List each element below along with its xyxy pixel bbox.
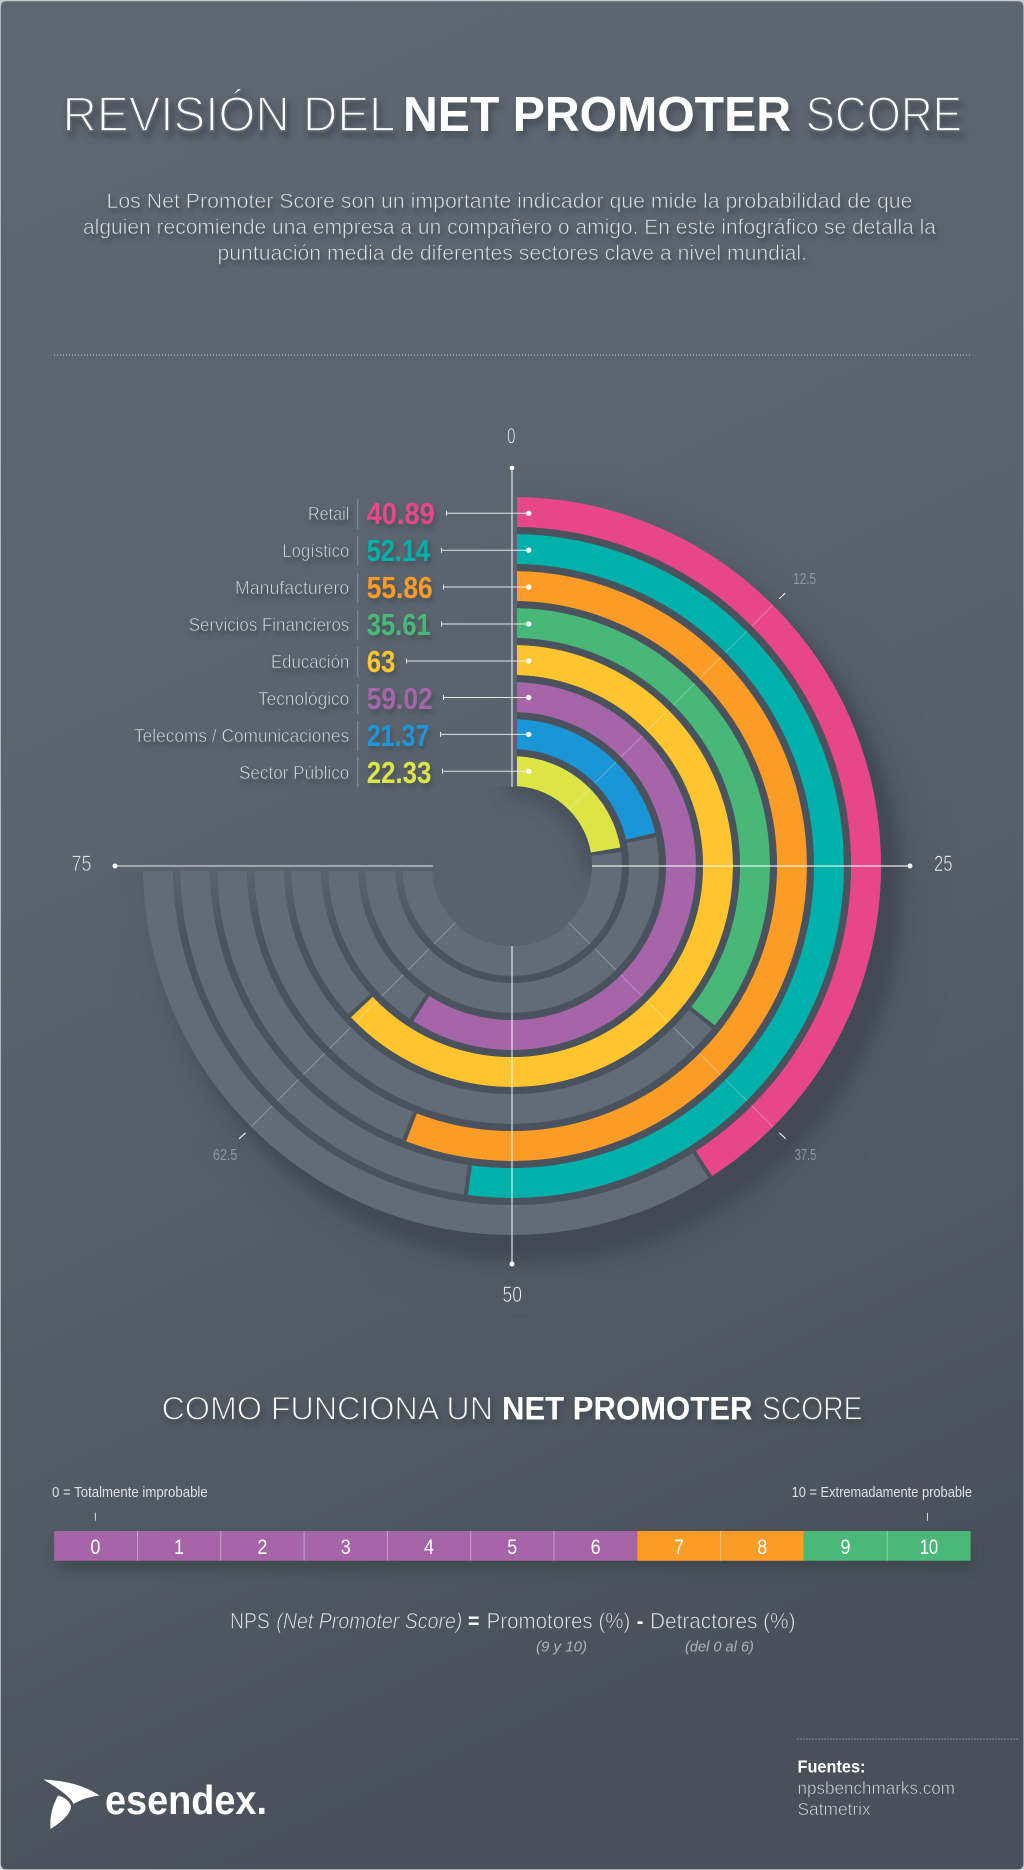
esendex logo: esendex. xyxy=(105,1777,267,1823)
legend row: Telecoms / Comunicaciones: 21.37 xyxy=(367,718,429,753)
legend row: Logístico: 52.14 xyxy=(367,533,431,568)
legend row: Sector Público: Sector Público xyxy=(239,762,349,783)
legend row: Sector Público xyxy=(239,755,531,790)
NPS formula: Promotores (%) xyxy=(487,1609,630,1634)
score scale bar: 8 xyxy=(757,1535,767,1559)
arc: Servicios Financieros 35.61 xyxy=(517,608,770,1026)
section heading: COMO FUNCIONA UN xyxy=(162,1390,493,1426)
NPS formula: Detractores (%) xyxy=(650,1609,796,1634)
arc: Tecnológico 59.02 xyxy=(343,697,681,1035)
intro paragraph: Los Net Promoter Score son un importante indicador que mide la probabilidad de que xyxy=(106,190,912,213)
legend row: Manufacturero: 55.86 xyxy=(367,570,433,605)
grey background tracks xyxy=(143,837,878,1235)
NPS formula: = xyxy=(468,1609,479,1634)
legend row: Logístico: Logístico xyxy=(282,540,349,561)
scale end labels xyxy=(52,1485,972,1521)
NPS formula: (Net Promoter Score) xyxy=(276,1609,462,1634)
legend: sector labels and values xyxy=(134,496,531,790)
arc: Manufacturero 55.86 xyxy=(406,571,807,1161)
axis labels: 0 xyxy=(507,424,516,448)
axis labels: 50 xyxy=(502,1282,522,1307)
section heading xyxy=(162,1390,863,1426)
arc: Educación 63 xyxy=(306,660,718,1072)
esendex logo xyxy=(44,1777,267,1829)
score scale bar: 5 xyxy=(507,1535,517,1559)
legend row: Manufacturero: Manufacturero xyxy=(235,577,349,598)
legend row: Telecoms / Comunicaciones: Telecoms / Comunicaciones xyxy=(134,725,349,746)
legend row: Retail xyxy=(308,496,531,531)
title: SCORE xyxy=(806,88,962,142)
legend row: Tecnológico: 59.02 xyxy=(367,681,433,716)
legend row: Educación: 63 xyxy=(367,644,395,679)
NPS formula: (9 y 10) xyxy=(536,1639,587,1656)
legend row: Telecoms / Comunicaciones xyxy=(134,718,531,753)
scale end labels: 10 = Extremadamente probable xyxy=(792,1485,972,1501)
section heading: SCORE xyxy=(762,1390,862,1426)
legend row: Servicios Financieros: Servicios Financieros xyxy=(189,614,349,635)
legend row: Retail: Retail xyxy=(308,503,349,524)
score scale bar: 3 xyxy=(341,1535,351,1559)
intro paragraph: puntuación media de diferentes sectores clave a nivel mundial. xyxy=(218,242,807,265)
NPS formula xyxy=(230,1609,796,1656)
sources: npsbenchmarks.com xyxy=(798,1778,955,1798)
arc: Sector Público 22.33 xyxy=(517,756,620,852)
axis labels xyxy=(72,424,952,1307)
arc: Retail 40.89 xyxy=(517,497,881,1176)
legend row: Tecnológico xyxy=(258,681,531,716)
score scale bar: 0 xyxy=(90,1535,100,1559)
minor axis labels xyxy=(213,571,816,1164)
score scale bar: 6 xyxy=(591,1535,601,1559)
title: REVISIÓN DEL xyxy=(62,88,396,142)
score scale bar: 10 xyxy=(920,1535,938,1559)
sources xyxy=(798,1756,955,1819)
score scale bar: 7 xyxy=(674,1535,684,1559)
chart drop shadow xyxy=(164,556,907,1266)
score scale bar: 1 xyxy=(174,1535,184,1559)
sources: Fuentes: xyxy=(798,1756,866,1776)
legend row: Manufacturero xyxy=(235,570,531,605)
arc: Logístico 52.14 xyxy=(468,534,844,1198)
score scale bar: 4 xyxy=(424,1535,434,1559)
score scale bar: 2 xyxy=(257,1535,267,1559)
axis lines xyxy=(112,466,912,1266)
NPS formula: (del 0 al 6) xyxy=(685,1639,754,1656)
NPS formula: NPS xyxy=(230,1609,270,1634)
icon: esendex arrow xyxy=(44,1780,100,1829)
axis labels: 25 xyxy=(934,851,952,876)
score scale bar: 9 xyxy=(840,1535,850,1559)
intro paragraph xyxy=(83,190,936,265)
arc: Telecoms 21.37 xyxy=(517,719,655,840)
axis labels: 75 xyxy=(72,851,92,876)
legend row: Sector Público: 22.33 xyxy=(367,755,431,790)
legend row: Educación xyxy=(271,644,531,679)
legend row: Logístico xyxy=(282,533,531,568)
legend row: Retail: 40.89 xyxy=(367,496,435,531)
arcs: values per sector xyxy=(351,497,881,1198)
section heading: NET PROMOTER xyxy=(502,1390,752,1426)
score scale bar xyxy=(54,1531,971,1561)
minor axis labels: 12.5 xyxy=(793,571,816,588)
title: NET PROMOTER xyxy=(403,88,791,142)
intro paragraph: alguien recomiende una empresa a un compañero o amigo. En este infográfico se detalla la xyxy=(83,216,936,239)
title xyxy=(62,88,962,142)
chart centre hole xyxy=(432,786,592,946)
minor axis labels: 62.5 xyxy=(213,1147,237,1164)
legend row: Servicios Financieros: 35.61 xyxy=(367,607,431,642)
minor axis labels: 37.5 xyxy=(795,1147,816,1164)
legend row: Tecnológico: Tecnológico xyxy=(258,688,349,709)
legend row: Educación: Educación xyxy=(271,651,349,672)
sources: Satmetrix xyxy=(798,1799,871,1819)
axis ticks xyxy=(239,593,786,1139)
legend row: Servicios Financieros xyxy=(189,607,531,642)
coloured arc end shadows xyxy=(348,833,715,1196)
NPS formula: - xyxy=(637,1609,643,1634)
scale end labels: 0 = Totalmente improbable xyxy=(52,1485,208,1501)
radial chart xyxy=(72,424,952,1307)
